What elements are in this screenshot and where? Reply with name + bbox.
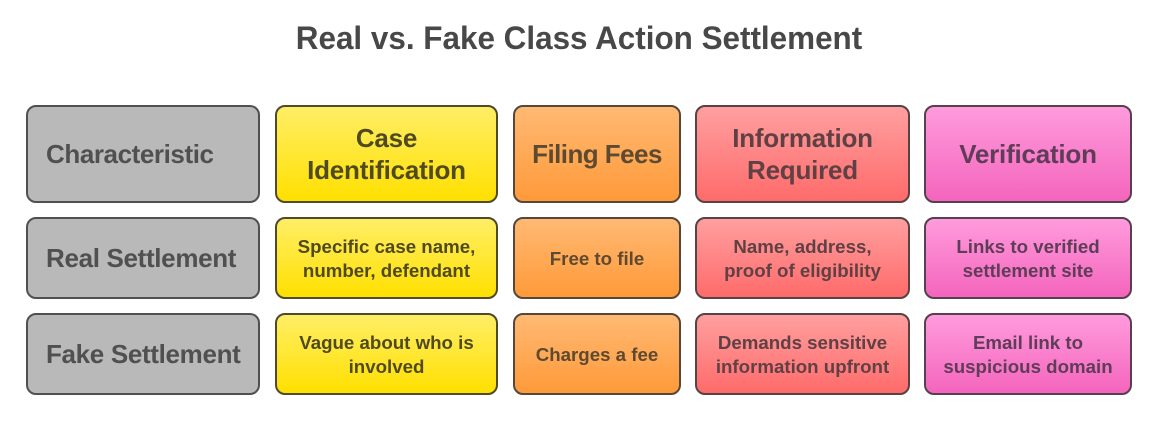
panel: header filing fees (513, 105, 681, 203)
panel: fake filing fees: Charges a fee (536, 344, 658, 364)
panel: real case identification (275, 217, 498, 299)
panel: header information required: Information (732, 123, 873, 153)
title: Real vs. Fake Class Action Settlement (296, 20, 862, 56)
panel: real case identification: Specific case name, (298, 236, 475, 256)
panel: fake information required: information upfront (716, 356, 889, 376)
panel: header information required (695, 105, 910, 203)
panel: real verification: settlement site (963, 260, 1093, 280)
panel: fake case identification (275, 313, 498, 395)
panel: fake case identification: involved (349, 356, 424, 376)
panel: header characteristic: Characteristic (46, 139, 214, 169)
panel: header case identification: Identification (307, 155, 466, 185)
panel: real filing fees (513, 217, 681, 299)
panel: header case identification (275, 105, 498, 203)
panel: real verification: Links to verified (956, 236, 1100, 256)
panel: fake information required (695, 313, 910, 395)
panel: fake verification: Email link to (973, 332, 1083, 352)
panel: real settlement label: Real Settlement (46, 243, 236, 273)
panel: real information required: proof of eligibility (724, 260, 881, 280)
panel: real filing fees: Free to file (550, 248, 644, 268)
panel: header information required: Required (747, 155, 858, 185)
panel: fake filing fees (513, 313, 681, 395)
panel: header case identification: Case (356, 123, 417, 153)
panel: fake verification (924, 313, 1132, 395)
panel: fake settlement label: Fake Settlement (46, 339, 240, 369)
panel: header characteristic (26, 105, 260, 203)
panel: real verification (924, 217, 1132, 299)
panel: header verification: Verification (959, 139, 1097, 169)
panel: real settlement label (26, 217, 260, 299)
panel: fake information required: Demands sensitive (718, 332, 887, 352)
panel: real information required (695, 217, 910, 299)
panel: header filing fees: Filing Fees (532, 139, 662, 169)
panel: real information required: Name, address, (733, 236, 872, 256)
panel: header verification (924, 105, 1132, 203)
panel: fake settlement label (26, 313, 260, 395)
panel: fake verification: suspicious domain (943, 356, 1113, 376)
panel: real case identification: number, defendant (303, 260, 470, 280)
panel: fake case identification: Vague about who is (299, 332, 474, 352)
